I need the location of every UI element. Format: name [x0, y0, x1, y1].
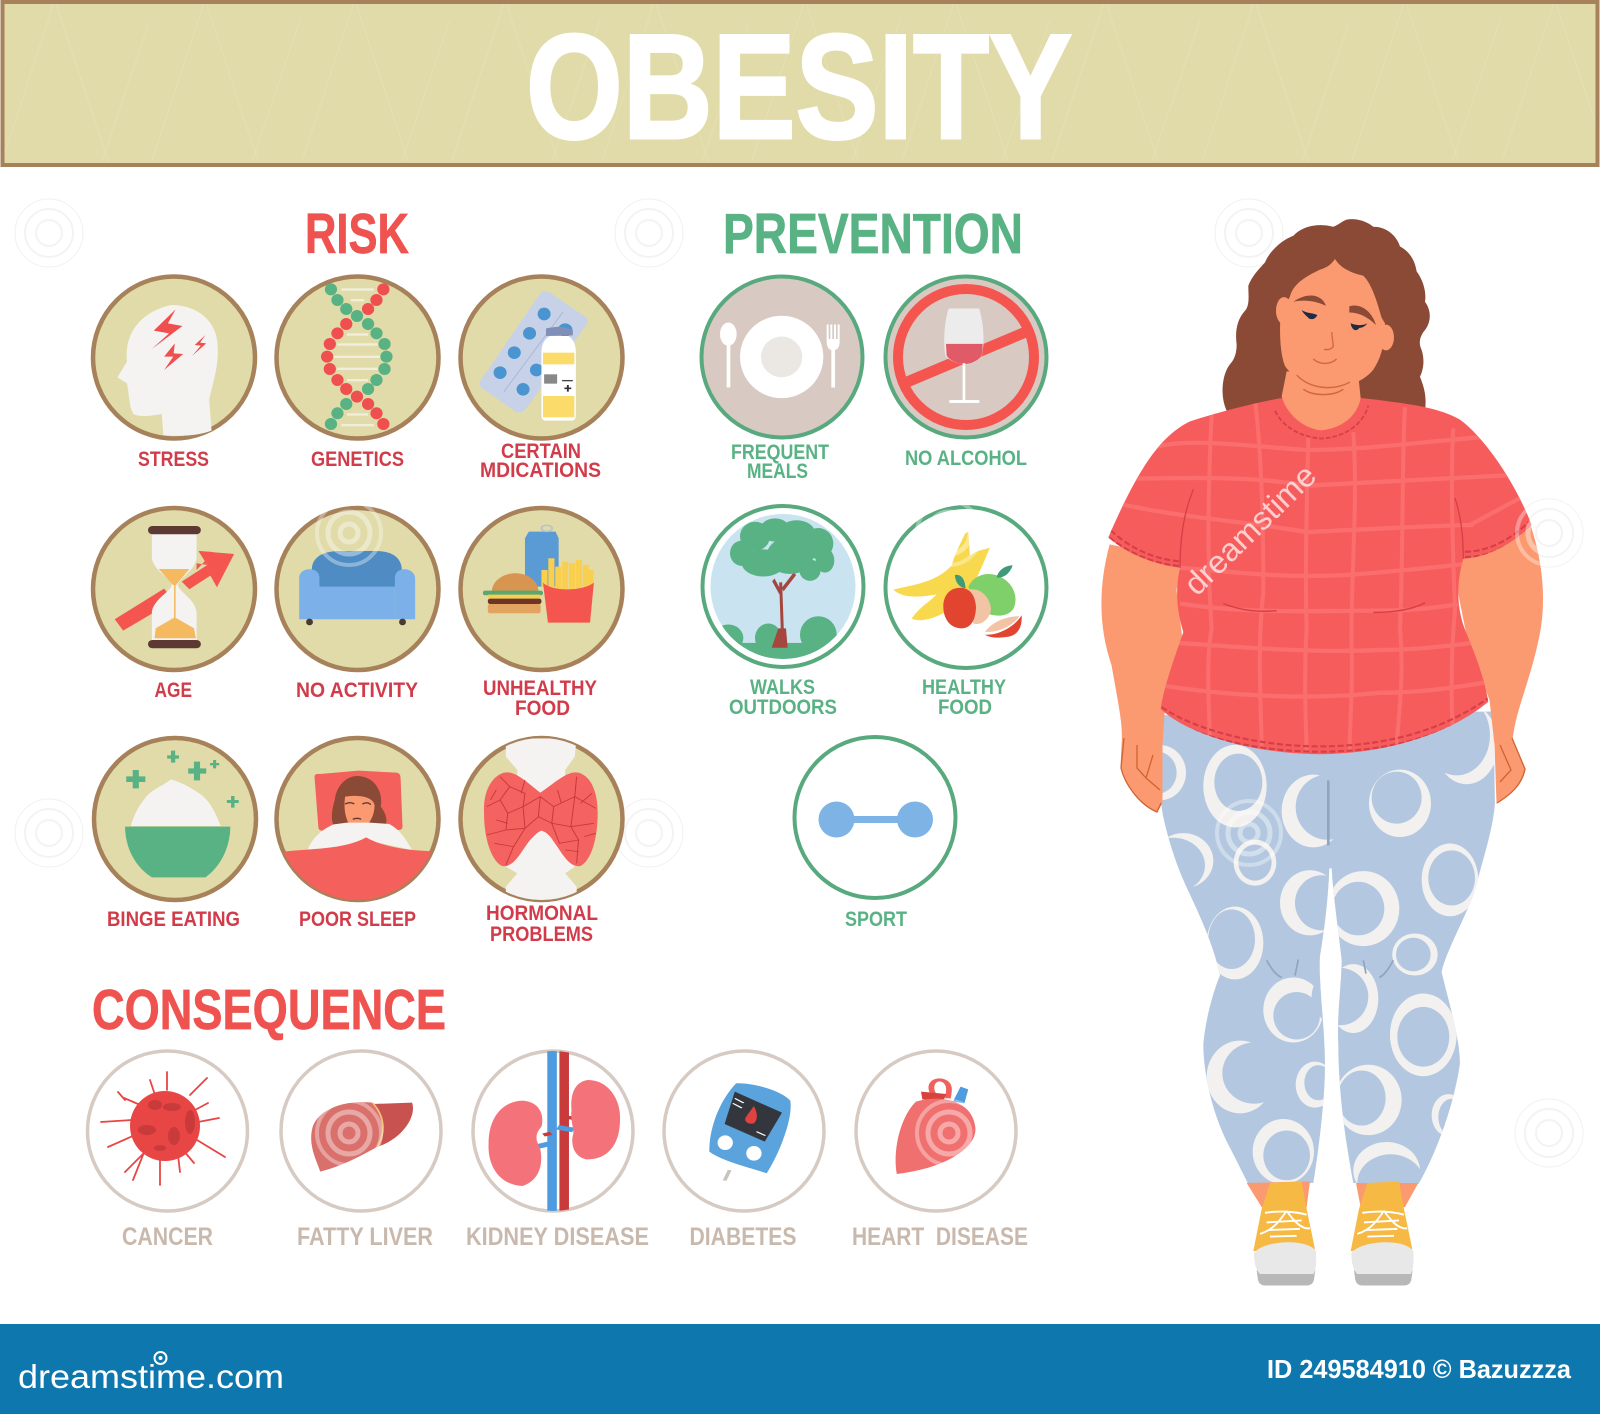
leggings	[1162, 712, 1495, 1184]
label: genetics: GENETICS	[311, 448, 404, 471]
label: frequent meals: MEALS	[747, 460, 808, 483]
label: hormonal problems	[486, 902, 598, 946]
label: kidney disease: KIDNEY DISEASE	[466, 1223, 649, 1251]
label: stress: STRESS	[138, 448, 209, 471]
label: hormonal problems: PROBLEMS	[490, 923, 593, 946]
shoes	[1247, 1181, 1418, 1286]
illustration: woman	[1100, 219, 1543, 1286]
label: walks outdoors: WALKS	[750, 676, 815, 699]
title banner	[2, 2, 1598, 170]
icon: healthy food	[886, 507, 1046, 668]
watermark: shirt: dreamstime	[1177, 457, 1323, 602]
label: age: AGE	[154, 679, 192, 702]
label: diabetes: DIABETES	[690, 1223, 796, 1251]
icon: genetics	[276, 276, 438, 438]
label: sport: SPORT	[845, 908, 907, 931]
footer bar	[0, 1324, 1600, 1414]
icon: hormonal problems	[460, 738, 622, 902]
heading: risk: RISK	[305, 202, 409, 266]
label: hormonal problems: HORMONAL	[486, 902, 598, 925]
label: healthy food: FOOD	[938, 696, 992, 719]
label: certain medications	[480, 440, 601, 482]
label: unhealthy food: FOOD	[515, 697, 570, 720]
hand lines	[1121, 738, 1525, 812]
label: unhealthy food	[483, 677, 597, 720]
icon: no alcohol	[886, 276, 1046, 438]
label: heart disease: HEART DISEASE	[852, 1223, 1028, 1251]
label: no activity: NO ACTIVITY	[296, 679, 418, 702]
label: healthy food	[922, 676, 1006, 719]
label: certain medications: CERTAIN	[501, 440, 581, 463]
panel: consequence	[88, 978, 1028, 1251]
label: walks outdoors	[729, 676, 837, 719]
label: binge eating: BINGE EATING	[107, 908, 240, 931]
icon: certain medications	[460, 276, 622, 438]
title: OBESITY	[526, 3, 1072, 170]
icon: poor sleep	[276, 738, 438, 907]
shirt	[1100, 380, 1540, 760]
label: cancer: CANCER	[122, 1223, 213, 1251]
icon: sport	[794, 737, 956, 898]
right arm	[1458, 525, 1543, 803]
icon: fatty liver	[281, 1051, 441, 1211]
label: fatty liver: FATTY LIVER	[297, 1223, 433, 1251]
left arm	[1102, 545, 1182, 812]
icon: heart disease	[856, 1051, 1016, 1211]
label: frequent meals	[731, 441, 829, 483]
label: healthy food: HEALTHY	[922, 676, 1006, 699]
icon: diabetes	[664, 1051, 824, 1211]
label: no alcohol: NO ALCOHOL	[905, 447, 1027, 470]
label: poor sleep: POOR SLEEP	[299, 908, 416, 931]
panel: risk	[93, 202, 622, 946]
panel: prevention	[700, 202, 1046, 931]
footer logo: dreamstime.com	[18, 1358, 284, 1395]
heading: prevention: PREVENTION	[723, 202, 1023, 266]
label: walks outdoors: OUTDOORS	[729, 696, 837, 719]
heading: consequence: CONSEQUENCE	[92, 978, 446, 1042]
icon: cancer	[88, 1051, 248, 1211]
label: certain medications: MDICATIONS	[480, 459, 601, 482]
icon: stress	[93, 276, 255, 438]
icon: no activity	[276, 508, 438, 670]
footer credit: ID 249584910 © Bazuzzza	[1267, 1354, 1572, 1384]
hair	[1223, 219, 1430, 411]
icon: frequent meals	[702, 276, 862, 438]
label: frequent meals: FREQUENT	[731, 441, 829, 464]
icon: unhealthy food	[460, 508, 622, 670]
label: unhealthy food: UNHEALTHY	[483, 677, 597, 700]
icon: binge eating	[94, 738, 256, 900]
icon: walks outdoors	[700, 500, 870, 672]
icon: kidney disease	[473, 1050, 633, 1213]
neck and face	[1276, 259, 1394, 430]
icon: age	[93, 508, 255, 670]
